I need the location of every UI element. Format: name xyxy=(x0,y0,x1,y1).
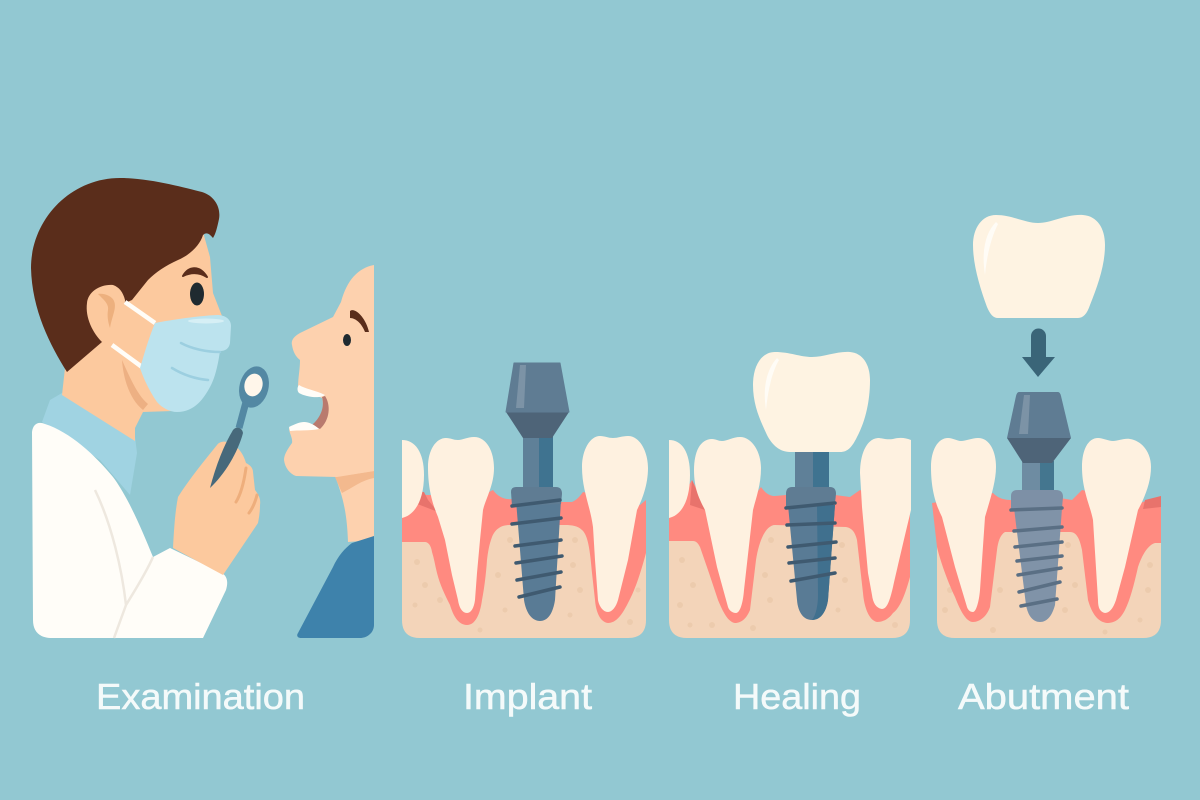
implant fixture xyxy=(786,450,836,620)
crown highlight xyxy=(765,358,779,410)
left tooth xyxy=(694,437,761,613)
gum shade xyxy=(1143,496,1161,509)
gum xyxy=(932,490,1161,623)
abutment upper xyxy=(506,363,569,412)
patient figure xyxy=(284,265,374,638)
implant fixture xyxy=(1007,392,1071,622)
mask highlight xyxy=(188,318,224,324)
threads xyxy=(786,503,836,581)
neck xyxy=(1022,461,1054,491)
threads xyxy=(512,500,562,597)
screw shade xyxy=(812,505,835,620)
crown xyxy=(753,352,870,452)
bone speckles xyxy=(677,537,898,631)
eyebrow xyxy=(183,268,207,277)
lab coat xyxy=(32,423,227,638)
neck xyxy=(523,436,553,490)
neck shade xyxy=(1040,461,1054,491)
abutment lower xyxy=(1007,438,1071,463)
patient shirt xyxy=(297,536,374,638)
upper teeth xyxy=(298,385,325,397)
crown highlight xyxy=(984,222,998,275)
screw body xyxy=(1014,508,1062,622)
eye xyxy=(190,282,204,306)
hand xyxy=(173,442,260,575)
crown xyxy=(973,215,1105,318)
patient face xyxy=(284,265,374,477)
gum xyxy=(669,480,910,623)
label: Healing: Healing xyxy=(733,676,861,717)
neck shade xyxy=(813,450,829,490)
mirror rim xyxy=(235,363,273,411)
right tooth xyxy=(860,438,911,609)
patient eye xyxy=(343,334,351,346)
screw body xyxy=(516,500,561,621)
panel: examination illustration xyxy=(31,178,374,638)
panel: implant step xyxy=(402,363,648,638)
label: Examination: Examination xyxy=(96,676,305,717)
ear inner xyxy=(98,294,115,328)
dentist figure xyxy=(31,178,273,638)
dentist collar xyxy=(42,393,137,495)
bone xyxy=(669,512,910,638)
neighbouring tooth sliver xyxy=(402,440,424,518)
handle grip xyxy=(210,428,243,488)
neck xyxy=(795,450,829,490)
right tooth xyxy=(1082,438,1151,613)
surgical mask xyxy=(140,315,231,412)
dentist ear xyxy=(87,285,125,342)
panel: abutment step xyxy=(931,215,1161,638)
abutment highlight xyxy=(1019,395,1030,434)
collar xyxy=(786,487,836,508)
finger lines xyxy=(236,468,257,513)
right tooth xyxy=(582,436,648,612)
left tooth xyxy=(428,437,494,613)
gum shade xyxy=(402,490,438,512)
bone xyxy=(402,512,646,638)
patient neck xyxy=(335,470,374,542)
gum xyxy=(402,490,646,625)
label: Implant: Implant xyxy=(463,676,592,717)
collar xyxy=(1011,490,1063,510)
neck shadow xyxy=(335,471,374,493)
bone speckles xyxy=(942,542,1153,634)
lower teeth xyxy=(289,422,319,431)
coat seams xyxy=(95,490,153,638)
bone xyxy=(937,512,1161,638)
neck shade xyxy=(539,436,553,490)
arrow: crown placement xyxy=(1022,329,1055,377)
left tooth xyxy=(931,438,996,612)
gum shade xyxy=(690,480,705,510)
dentist face and neck xyxy=(62,232,222,441)
screw body xyxy=(788,505,835,620)
mask straps xyxy=(112,302,155,367)
mask folds xyxy=(172,343,220,380)
abutment lower xyxy=(506,412,569,438)
panel: healing step xyxy=(669,352,911,638)
label: Abutment: Abutment xyxy=(958,676,1129,717)
dentist hair xyxy=(31,178,219,372)
patient eyebrow xyxy=(350,310,369,332)
neighbouring tooth sliver xyxy=(669,440,690,518)
mirror glass xyxy=(242,372,265,398)
implant fixture xyxy=(506,363,569,621)
mirror handle xyxy=(239,402,246,428)
abutment upper xyxy=(1007,392,1071,438)
bone speckles xyxy=(412,537,640,632)
abutment highlight xyxy=(516,365,526,408)
threads xyxy=(1011,508,1062,606)
collar xyxy=(511,487,562,506)
mouth interior xyxy=(312,396,329,429)
dental mirror xyxy=(210,363,273,488)
jaw shade xyxy=(122,360,148,410)
